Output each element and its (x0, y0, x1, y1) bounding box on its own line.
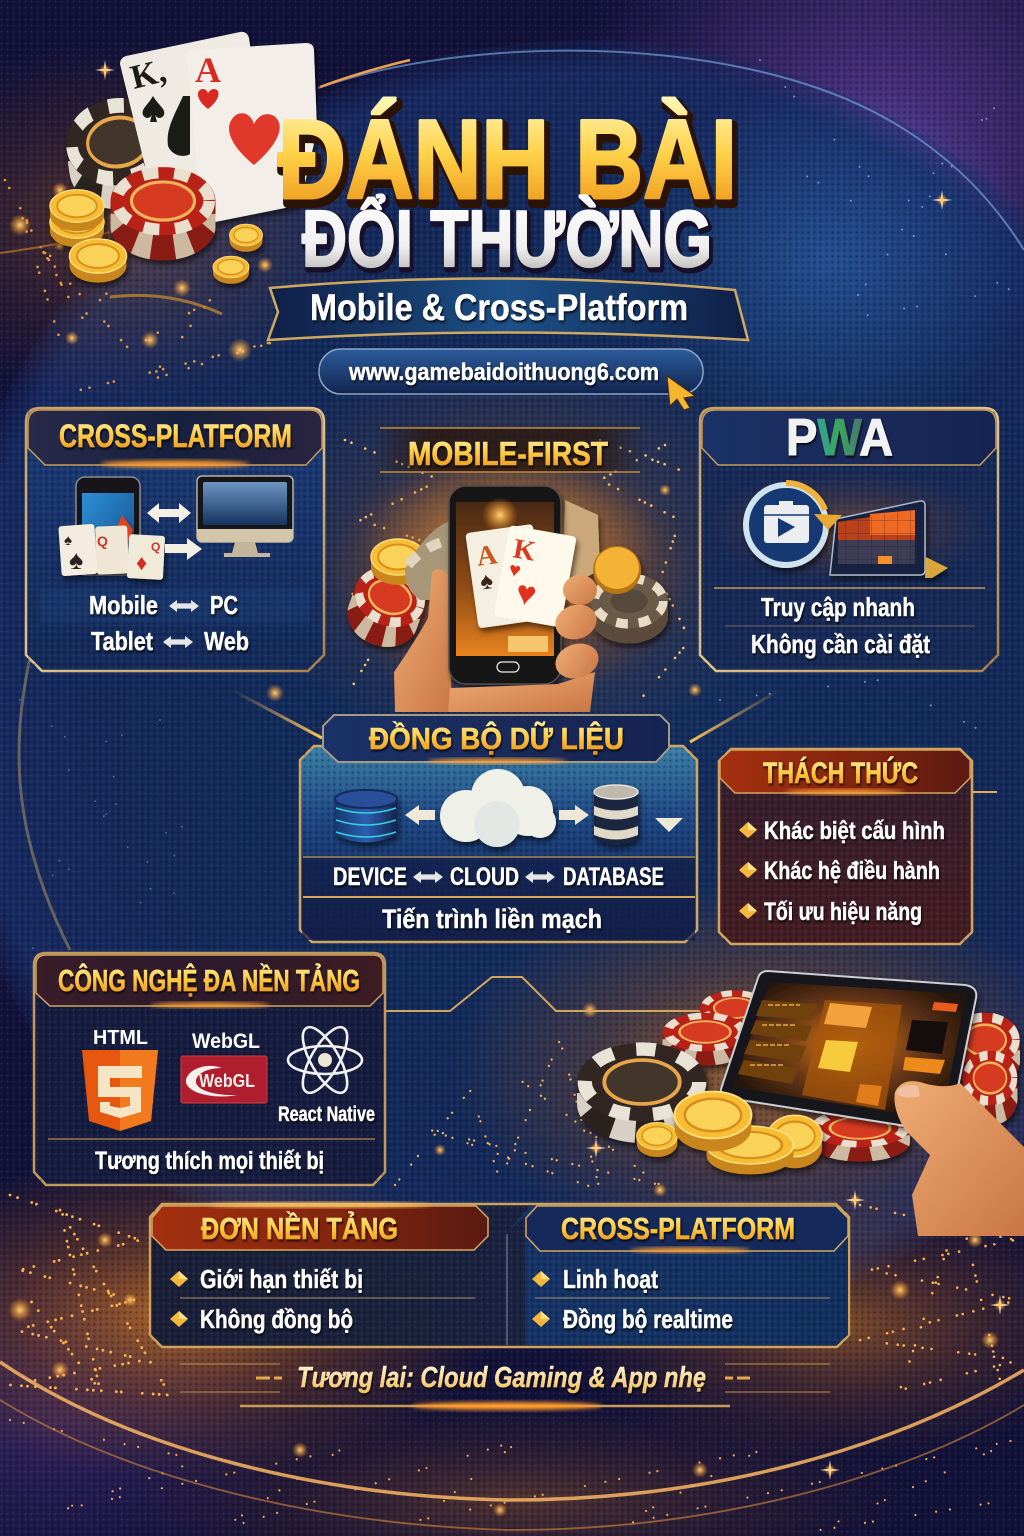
list item (532, 1264, 658, 1294)
panel: single vs cross-platform comparison (150, 1202, 849, 1347)
text: fast access: Truy cập nhanh (761, 592, 915, 622)
icon: cloud database (594, 785, 638, 845)
subtitle ribbon: Mobile & Cross-Platform (310, 287, 688, 328)
title: main heading (278, 97, 740, 286)
text: device cloud database: CLOUD (450, 863, 519, 891)
list item: Giới hạn thiết bị (200, 1264, 363, 1294)
panel: mobile-first (325, 428, 695, 712)
title: main heading: ĐỔI THƯỜNG (302, 194, 712, 283)
panel: cross-platform (26, 408, 324, 671)
tablet illustration with chips and hand (577, 971, 1024, 1236)
list item: Linh hoạt (563, 1264, 658, 1294)
text: mobile to pc (40, 589, 310, 623)
text: tablet to web (91, 626, 249, 656)
text: device cloud database: DEVICE (333, 863, 407, 891)
chips and coins left (339, 520, 452, 657)
text: mobile to pc: PC (210, 590, 238, 620)
panel heading: THÁCH THỨC (763, 756, 918, 790)
comparison heading: cross-platform (526, 1206, 848, 1252)
icon: html5: HTML (93, 1027, 148, 1049)
hand (894, 1081, 1024, 1236)
ace playing card (187, 43, 317, 223)
icon: cards: ♠ (69, 545, 83, 575)
future callout (180, 1362, 830, 1410)
list item (532, 1304, 733, 1334)
king playing card (120, 32, 255, 190)
text: tablet to web: Web (204, 626, 249, 656)
panel heading (720, 750, 970, 794)
panel: multi-platform technology (34, 953, 385, 1185)
panel heading: PWA (786, 409, 893, 467)
icon: cards: Q (97, 533, 108, 549)
panel heading (36, 955, 383, 1008)
cards on phone: K (511, 533, 538, 568)
cards on phone (465, 524, 577, 628)
title: main heading: ĐÁNH BÀI (281, 102, 740, 227)
subtitle ribbon (268, 278, 748, 340)
panel heading: MOBILE-FIRST (408, 435, 608, 472)
icon: cards (58, 515, 165, 580)
panel: challenges (719, 749, 972, 944)
gold coins (50, 190, 262, 284)
website url pill (319, 349, 703, 410)
text: device cloud database (333, 863, 664, 891)
icon: cards: Q (151, 540, 160, 554)
hand fingers (448, 575, 603, 712)
website url pill: www.gamebaidoithuong6.com (348, 359, 659, 386)
icon: phone (76, 477, 140, 575)
icon: react native (278, 1021, 375, 1126)
icon: webgl (181, 1030, 267, 1103)
future callout: Tương lai: Cloud Gaming & App nhẹ (297, 1362, 706, 1394)
cards on phone: ♥ (513, 573, 539, 614)
list item: Đồng bộ realtime (563, 1304, 733, 1334)
icon: cursor (667, 376, 695, 410)
arrows: sync flow (405, 805, 683, 832)
panel heading: CROSS-PLATFORM (59, 418, 292, 454)
icon: cloud (440, 769, 556, 847)
list item: Tối ưu hiệu năng (764, 898, 922, 926)
icon: app window (746, 483, 948, 578)
icon: webgl: WebGL (192, 1030, 260, 1053)
text: no install: Không cần cài đặt (751, 629, 930, 659)
text: mobile to pc: Mobile (89, 590, 158, 620)
comparison heading: cross-platform: CROSS-PLATFORM (561, 1211, 795, 1246)
text: seamless progress: Tiến trình liền mạch (382, 904, 602, 934)
panel heading (323, 715, 669, 764)
chips and coins right (562, 500, 668, 644)
list item: Khác biệt cấu hình (764, 817, 945, 845)
icon: cards: ♦ (136, 550, 147, 575)
panel heading: ĐỒNG BỘ DỮ LIỆU (369, 720, 624, 756)
hero illustration: cards, chips and coins (50, 32, 317, 284)
king playing card: K, (127, 52, 170, 97)
hand holding phone back (394, 569, 452, 712)
icon: device database (335, 790, 397, 842)
icon: monitor (197, 476, 293, 557)
panel heading (28, 410, 322, 468)
comparison heading: single platform: ĐƠN NỀN TẢNG (201, 1211, 398, 1246)
panel heading: CÔNG NGHỆ ĐA NỀN TẢNG (58, 962, 360, 998)
list item: Không đồng bộ (200, 1304, 353, 1334)
title: main heading: ĐỔI THƯỜNG (304, 197, 714, 286)
panel: pwa (700, 408, 998, 671)
text: device compatibility: Tương thích mọi thiết bị (95, 1147, 324, 1175)
tablet (721, 971, 976, 1131)
comparison heading: single platform (152, 1202, 488, 1250)
arrows: device links (147, 503, 202, 560)
icon: html5 (82, 1027, 158, 1131)
icon: cards: ♠ (64, 532, 72, 549)
cards on phone: ♠ (478, 567, 495, 596)
cards on phone: A (475, 539, 500, 573)
list item: Khác hệ điều hành (764, 857, 940, 885)
list item (170, 1304, 353, 1334)
list item (739, 898, 922, 926)
panel: data sync (300, 715, 697, 942)
text: device cloud database: DATABASE (563, 863, 664, 891)
ace playing card: A (195, 50, 221, 90)
text: tablet to web: Tablet (91, 626, 153, 656)
title: main heading: ĐÁNH BÀI (278, 97, 737, 222)
panel heading (702, 409, 996, 467)
phone (449, 486, 561, 684)
cards on phone: ♥ (507, 559, 523, 583)
gold coins (637, 1092, 822, 1174)
icon: webgl: WebGL (199, 1071, 255, 1091)
chips behind tablet (577, 990, 1020, 1162)
icon: react native: React Native (278, 1103, 375, 1126)
